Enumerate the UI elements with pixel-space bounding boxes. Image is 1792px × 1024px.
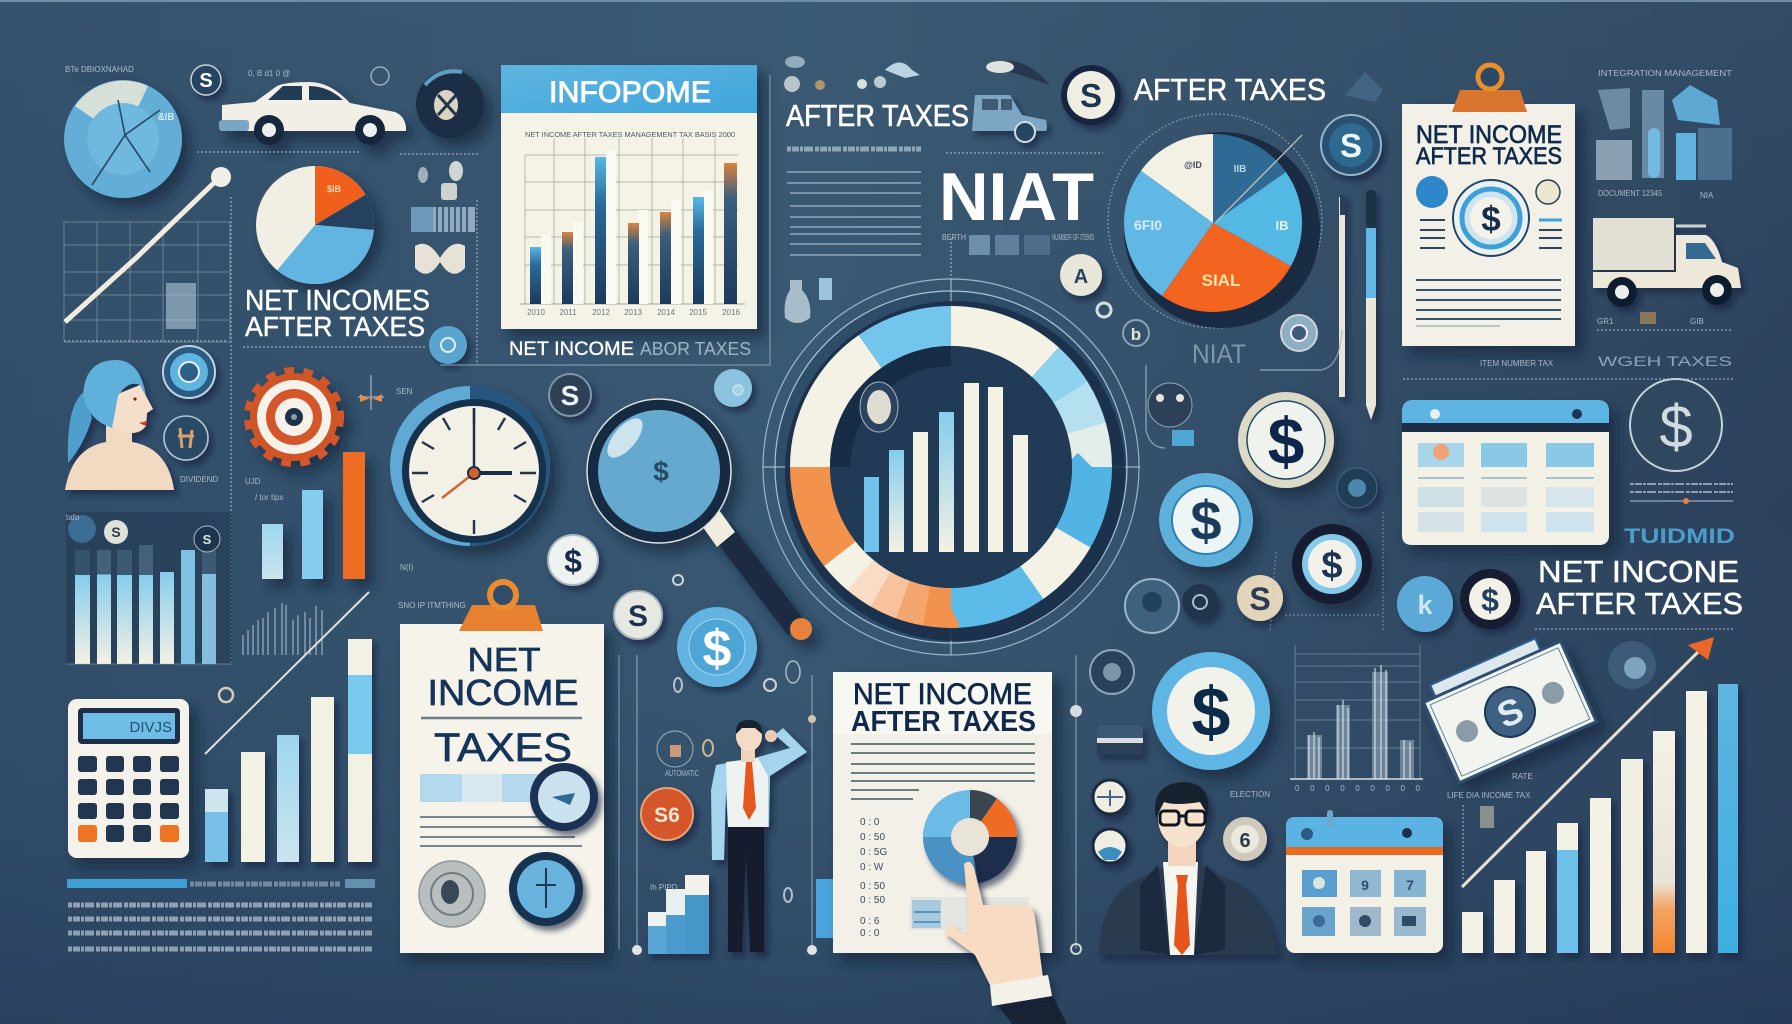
small text lines right [1624,484,1735,548]
beige coin: S [1249,581,1271,617]
calendar cells: 7 [1406,877,1414,893]
small table [910,897,1029,930]
blue coin [1397,576,1453,632]
small ring icons [1097,303,1149,346]
labels by colored bars: N(I) [400,563,414,572]
big right pie chart: 6FI0 [1134,217,1162,233]
magnifying glass: $ [653,456,669,487]
clock [390,386,550,546]
small icons beside pie [411,161,477,365]
top right collage of small illustrations: INTEGRATION MANAGEMENT [1598,69,1732,78]
column of figures: 0 : 0 [860,928,880,939]
coin with dollar shield [548,535,598,585]
banknotes: S [1491,689,1530,736]
column of figures: 0 : 0 [860,817,880,828]
small doodles row top left: 0, B d1 0 @ [248,69,290,78]
document title: AFTER TAXES [851,706,1036,738]
target gear [250,373,338,461]
calendar [1286,810,1443,953]
blue fading bars panel: S [111,524,121,540]
document title [851,678,1036,738]
document: net income taxes bottom left [400,582,604,953]
lens icon [530,763,598,831]
dollar coin dark ring: $ [1321,545,1343,587]
top right collage of small illustrations: DOCUMENT 12345 [1598,189,1662,198]
chart grid and bars: 2013 [624,308,642,317]
chart grid and bars: 2010 [527,308,545,317]
S badge next to clock [549,374,591,416]
document: net income after taxes center [816,672,1052,953]
mini line chart: 0 0 0 0 0 0 0 0 0 [1295,784,1421,793]
panel header [501,65,757,113]
orange clip [459,582,543,631]
big dollar coin [1152,652,1270,770]
ring segments [810,326,1092,608]
arrow [1462,637,1714,887]
heading: net income after taxes right [1535,554,1743,629]
S coin top [1061,65,1121,125]
caption: net income after taxes: ABOR TAXES [640,339,751,359]
small round gauges [1093,780,1127,863]
small loops near doc [650,575,800,902]
labels by colored bars: / tor tips [255,493,283,502]
glass dollar circle [1630,379,1722,471]
chart grid and bars: 2016 [722,308,740,317]
businessman with glasses [1099,782,1278,955]
S coin top: S [1080,77,1102,114]
heading: net incomes after taxes: NET INCOMES [245,285,430,317]
line chart with grid [64,167,231,342]
dollar coin black ring: $ [1481,582,1499,618]
top right collage of small illustrations [1596,69,1732,200]
column of figures: 0 : 5G [860,847,887,858]
labels under truck: ITEM NUMBER TAX [1480,359,1554,368]
dollar coin cream: $ [1268,404,1304,478]
blue dollar coin [677,607,757,687]
chart grid and bars: 2012 [592,308,610,317]
document heading: NET [468,641,540,678]
seal with dollar: $ [1481,200,1501,239]
labels by colored bars: DIVIDEND [180,475,218,484]
cracked blue pie icon: BTe DBIOXNAHAD [65,65,134,74]
small text lines right: TUIDMID [1624,525,1735,548]
calendar cells: 9 [1361,877,1369,893]
glass nut icon: RATE [1512,772,1533,781]
dark emblem circle [416,70,484,138]
heading: net income after taxes right: NET INCONE [1538,554,1739,589]
mini stacked bars [648,875,709,954]
pointing hand [944,862,1067,1024]
labels under truck: GR1 [1597,317,1614,326]
S badge small: S [199,70,213,92]
caption: net income after taxes [440,75,770,365]
thin ghost bars [243,603,322,655]
magnifying glass [587,399,812,640]
cracked blue pie icon [64,65,182,198]
small dollar coin [614,591,662,639]
dollar coin black ring [1460,569,1520,629]
colored bars mid left [262,452,365,579]
rising bars with arrow [1462,637,1738,953]
scattered right labels [1230,790,1531,880]
blue coin: k [1417,590,1433,620]
blue fading bars panel [66,512,232,664]
small dollar coin: S [628,600,648,633]
blue coin [509,852,583,926]
dark small coin [1182,584,1218,620]
dollar coin blue [1159,473,1253,567]
chart grid and bars: NET INCOME AFTER TAXES MANAGEMENT TAX BASIS 2000 [525,132,735,139]
small hourglass icon: SEN [396,387,413,396]
big right pie chart: IIB [1234,164,1246,175]
document: net income after taxes top right [1402,65,1575,346]
labels by colored bars: SNO IP ITMTHING [398,601,466,610]
labels under truck: WGEH TAXES [1598,353,1732,369]
column of figures: 0 : 50 [860,881,885,892]
blue dollar coin: $ [703,620,732,678]
mini line chart [1290,645,1423,793]
scattered right labels: ELECTION [1230,790,1270,799]
small coin near businessman [1223,817,1267,861]
labels by colored bars: UJD [245,477,261,486]
browser panel [1402,400,1609,545]
delivery truck [1593,218,1741,307]
seal with dollar [1416,176,1560,256]
caption: net income after taxes: NET INCOME [509,339,634,360]
document lines [1416,220,1562,326]
coin with dollar shield: $ [564,543,582,579]
connectors and glass circles [1090,510,1383,694]
heading: NIAT: NIAT [939,159,1094,235]
column of figures [860,817,887,939]
panel: infopome bar chart [501,65,757,329]
faded NIAT with ornament: NIAT [1192,339,1246,369]
small squares under NIAT: BERTH [942,233,966,242]
small dark target [1337,468,1377,508]
chart grid and bars: 2011 [559,308,577,317]
big dollar coin: $ [1192,673,1230,751]
column of figures: 0 : 50 [860,832,885,843]
doc donut chart [937,804,1003,870]
big right pie chart: IB [1276,218,1288,233]
labels under truck: GIB [1690,317,1704,326]
small loops near doc: Ih PIPD [650,883,678,892]
glass oval [860,382,898,432]
document heading: NET INCOME [1416,121,1562,149]
central ring chart [762,278,1140,655]
column of figures: 0 : 6 [860,916,880,927]
strip and caption lines bottom left [67,879,375,949]
document heading: AFTER TAXES [1416,143,1562,170]
cracked blue pie icon: &IB [158,112,174,123]
calculator [68,699,189,858]
calculator: DIVJS [129,719,172,736]
big right pie chart [1108,114,1322,328]
heading: net incomes after taxes: AFTER TAXES [245,311,425,342]
column of figures: 0 : W [860,862,884,873]
small coin near businessman: 6 [1239,830,1251,852]
S badge beside pie [1321,115,1381,175]
labels under truck [1403,312,1733,379]
glass nut icon [1512,641,1656,781]
faded NIAT with ornament [1146,315,1342,448]
document lines [851,744,1035,799]
small blue token [429,326,467,364]
bars [1462,684,1738,953]
pie chart with orange wedge: $IB [327,184,341,194]
small doodles row top left [197,67,480,154]
woman portrait [65,360,174,490]
chart grid and bars [520,132,745,317]
dollar coin cream [1238,392,1334,488]
concentric badge [163,346,215,398]
orange dollar coin: S6 [654,804,680,827]
businessman raising arm [711,720,807,952]
dollar coin blue: $ [1190,489,1222,552]
grey coin [419,861,485,927]
glass sketch icon: AUTOMATIC [665,769,699,778]
document heading: TAXES [434,726,572,770]
bottle icons [785,278,832,323]
heading: net incomes after taxes [243,285,430,347]
orange clip [1452,65,1527,112]
stapler block [1097,725,1143,755]
dollar coin dark ring [1292,524,1372,604]
chart grid and bars: 2015 [689,308,707,317]
small squares under NIAT: NUMBER OF ITEMS [1052,233,1094,242]
heading: net income after taxes right: AFTER TAXES [1536,586,1743,621]
top right collage of small illustrations: NIA [1700,191,1714,200]
S badge next to clock: S [561,380,579,411]
calculator keys [78,756,179,842]
beige coin [1237,575,1283,621]
pens [1339,190,1376,420]
column of figures: 0 : 50 [860,895,885,906]
scattered right labels: LIFE DIA INCOME TAX [1447,791,1531,800]
document heading [1416,121,1562,170]
glass sketch icon [657,731,713,778]
picture band and lines [420,774,582,846]
bars [205,639,372,862]
S badge beside pie: S [1340,127,1362,164]
outlined badge [164,416,208,460]
big right pie chart: SIAL [1202,271,1240,290]
small token coin and ring [1060,254,1102,296]
top doodles and after taxes heading [784,56,1050,133]
bottom left bar chart with trend line [205,592,372,862]
top doodles and after taxes heading: AFTER TAXES [786,98,969,133]
document heading: INCOME [428,672,578,713]
glass dollar circle: $ [1659,393,1693,460]
small blue token near magnifier [714,369,752,407]
text lines block [787,149,921,255]
document heading [421,641,582,770]
labels by colored bars [180,475,466,610]
small token coin and ring: A [1074,266,1088,288]
vertical connector lines bottom [619,655,1082,955]
chart grid and bars: 2014 [657,308,675,317]
blue fading bars panel: tafo [66,513,80,522]
small ring icons: b [1131,325,1141,344]
car [219,82,406,145]
heading: after taxes right: AFTER TAXES [1134,72,1326,107]
browser cells [1418,443,1594,532]
small hourglass icon [358,375,413,410]
small squares under NIAT [942,233,1094,278]
blue fading bars panel: S [203,532,212,547]
vertical dashed divider left [230,197,232,664]
outer guide circles [762,278,1140,655]
banknotes [1418,629,1596,783]
central bars [864,383,1028,552]
calendar cells [1302,870,1426,936]
panel header: INFOPOME [549,76,711,109]
S badge small [191,65,221,95]
blue van [972,95,1047,142]
big right pie chart: @ID [1184,160,1202,170]
document title: NET INCOME [853,678,1032,711]
orange dollar coin [641,788,693,840]
pie chart with orange wedge [256,166,374,284]
